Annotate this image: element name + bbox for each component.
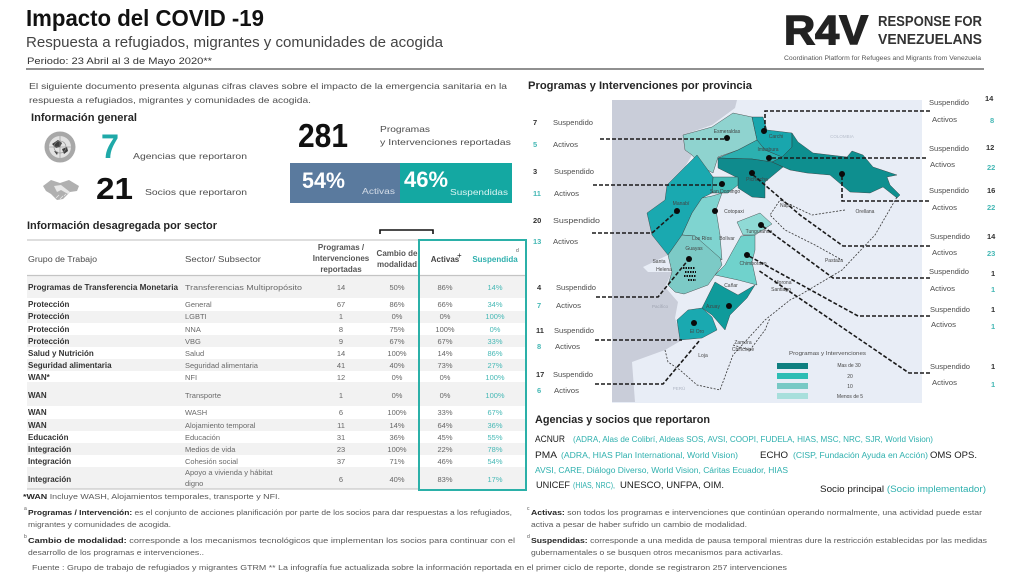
metric: 281 programas: Programas: [380, 124, 430, 134]
table rows: Seguridad alimentaria: [185, 361, 259, 370]
partner list: OMS OPS.: [930, 450, 977, 460]
table rows: 41: [337, 361, 345, 370]
logo: R4V Response for Venezuelans: Coordination Platform for Refugees and Migrants from Venezuela: [784, 55, 981, 62]
province: El Oro: [677, 308, 717, 340]
intro text: respuesta a refugiados, migrantes y comunidades de acogida.: [29, 95, 311, 105]
header: title block: Respuesta a refugiados, migrantes y comunidades de acogida: [26, 35, 444, 51]
legend: programas e intervenciones: 10: [847, 384, 853, 390]
table rows: 34%: [487, 300, 503, 309]
province figures: left: Suspendido: [553, 370, 593, 379]
province labels: Guayas: [685, 246, 703, 252]
table rows: WASH: [185, 408, 207, 417]
province: Tungurahua / Cotopaxi: [737, 213, 772, 235]
province figures: left: Suspendido: [553, 216, 600, 225]
table rows: 36%: [389, 433, 405, 442]
partner list: (HIAS, NRC),: [573, 481, 615, 490]
province labels: Zamora: [734, 340, 752, 346]
heading: programas por provincia: Programas y Intervenciones por provincia: [528, 80, 753, 92]
footnotes: left: desarrollo de los programas e intervenciones..: [28, 548, 204, 557]
table rows: Salud: [185, 349, 204, 358]
province figures: right: Suspendido: [929, 144, 969, 153]
province labels: Pacífico: [652, 304, 668, 309]
table rows: Protección: [28, 312, 69, 321]
table header: +: [457, 251, 462, 260]
panel: agencias y socios: [535, 414, 986, 494]
table rows: 86%: [487, 349, 503, 358]
footnotes: left: a: [24, 506, 27, 512]
table rows: WAN: [28, 421, 47, 430]
table header: Programas /: [318, 243, 365, 252]
table rows: Transferencias Multipropósito: [185, 283, 302, 292]
province labels: Carchi: [769, 134, 783, 140]
province figures: right: Suspendido: [929, 186, 969, 195]
metric: 21 socios: 21: [96, 171, 133, 206]
table rows: 12: [337, 373, 345, 382]
metric: 21 socios: Socios que reportaron: [145, 187, 247, 197]
province figures: right: 16: [987, 186, 995, 195]
table rows: 50%: [389, 283, 405, 292]
partner list: UNICEF: [536, 480, 571, 490]
province: Chimborazo: [715, 235, 757, 285]
province figures: right: [929, 94, 996, 389]
footnotes: right: Suspendidas: corresponde a una medida de pausa temporal mientras dure la restricción establecidas por las medidas: [531, 536, 987, 545]
stacked bar: activas vs suspendidas: [290, 163, 512, 203]
province figures: left: Activos: [553, 237, 578, 246]
metric: 281 programas: 281: [298, 117, 348, 154]
province figures: right: Suspendido: [930, 232, 970, 241]
table rows: 55%: [487, 433, 503, 442]
table rows: 31: [337, 433, 345, 442]
province figures: left: 17: [536, 370, 544, 379]
table rows: 1: [339, 391, 343, 400]
province figures: left: 11: [533, 189, 541, 198]
table rows: 100%: [387, 349, 407, 358]
table rows: 33%: [487, 337, 503, 346]
footnotes: right: activa a pesar de haber sufrido un cambio de modalidad.: [531, 520, 747, 529]
legend: socio principal: Socio principal (Socio implementador): [820, 484, 986, 494]
province figures: right: Suspendido: [930, 305, 970, 314]
table rows: 14%: [487, 283, 503, 292]
table rows: Cohesión social: [185, 457, 238, 466]
province figures: right: Activos: [932, 203, 957, 212]
province labels: Napo: [780, 203, 792, 209]
stacked bar: activas vs suspendidas: 54%: [302, 168, 345, 193]
province figures: right: Activos: [932, 378, 957, 387]
table rows: 22%: [437, 445, 453, 454]
province: Pichincha: [718, 158, 783, 198]
province figures: left: 4: [537, 283, 542, 292]
province labels: Santiago: [771, 287, 791, 293]
province labels: Loja: [698, 353, 708, 359]
province: Carchi: [752, 117, 792, 157]
table rows: Transporte: [185, 391, 221, 400]
legend: programas e intervenciones: Mas de 30: [837, 363, 861, 369]
partner list: ACNUR: [535, 434, 565, 444]
province labels: Morona: [775, 280, 792, 286]
table rows: 33%: [437, 408, 453, 417]
table rows: Seguridad alimentaria: [28, 361, 112, 370]
province labels: [652, 129, 875, 391]
leader lines: [592, 111, 930, 384]
table rows: 14%: [389, 421, 405, 430]
icon: United Nations emblem: [44, 132, 76, 162]
table rows: 11: [337, 421, 345, 430]
province: Los Ríos: [682, 193, 722, 260]
heading: información general: Información general: [31, 112, 137, 124]
province figures: right: 14: [985, 94, 994, 103]
province figures: left: Activos: [554, 189, 579, 198]
table rows: 78%: [487, 445, 503, 454]
table rows: [28, 283, 505, 488]
table rows: 37: [337, 457, 345, 466]
table rows: Salud y Nutrición: [28, 349, 94, 358]
footnotes: left: migrantes y comunidades de acogida.: [28, 520, 171, 529]
province figures: right: 22: [987, 203, 995, 212]
province figures: right: Activos: [930, 160, 955, 169]
table rows: 14: [337, 283, 345, 292]
table rows: Educación: [185, 433, 220, 442]
province figures: right: Activos: [931, 320, 956, 329]
table rows: 0%: [440, 373, 451, 382]
province figures: right: 14: [987, 232, 996, 241]
source line: Fuente : Grupo de trabajo de refugiados y migrantes GTRM ** La infografía fue actualizada sobre la información reportada en el primer ciclo de reporte, donde se registraron 257 intervenciones: [32, 563, 787, 572]
province figures: left: 3: [533, 167, 537, 176]
table rows: Integración: [28, 475, 71, 484]
table rows: 36%: [487, 421, 503, 430]
table rows: 100%: [485, 312, 505, 321]
table rows: 100%: [485, 373, 505, 382]
table rows: 86%: [389, 300, 405, 309]
province: Manabí: [647, 155, 713, 255]
intro text: El siguiente documento presenta algunas cifras claves sobre el impacto de la emergencia sanitaria en la: [29, 81, 507, 91]
footnotes: left: [23, 492, 515, 557]
table rows: Apoyo a vivienda y hábitat: [185, 468, 273, 477]
province labels: Helena: [656, 267, 672, 273]
ocean: [612, 100, 737, 402]
logo: R4V Response for Venezuelans: [784, 7, 982, 62]
province: Imbabura: [718, 140, 782, 162]
table rows: LGBTI: [185, 312, 207, 321]
table rows: NNA: [185, 325, 201, 334]
metric: 281 programas: [298, 117, 511, 154]
table rows: Educación: [28, 433, 69, 442]
province figures: right: Suspendido: [929, 98, 969, 107]
province figures: left: Activos: [554, 386, 579, 395]
legend: programas e intervenciones: [777, 351, 866, 400]
table rows: 67%: [437, 337, 453, 346]
legend: programas e intervenciones: Programas y Intervenciones: [789, 351, 866, 357]
province labels: Pastaza: [825, 258, 843, 264]
table rows: 0%: [440, 312, 451, 321]
table header: Intervenciones: [313, 254, 370, 263]
province figures: left: 11: [536, 326, 544, 335]
province boundaries: Loja, Zamora, Morona, Pastaza, Orellana: [665, 197, 897, 390]
table rows: Protección: [28, 337, 69, 346]
table rows: 45%: [437, 433, 453, 442]
table rows: 67%: [487, 408, 503, 417]
partner list: [535, 434, 977, 490]
province figures: right: 1: [991, 322, 995, 331]
partner list: AVSI, CARE, Diálogo Diverso, World Vision, Cáritas Ecuador, HIAS: [535, 466, 788, 475]
footnotes: left: b: [24, 534, 27, 540]
metric: 7 agencias: Agencias que reportaron: [133, 151, 247, 161]
province figures: left: 7: [537, 301, 541, 310]
table rows: 6: [339, 408, 343, 417]
province figures: right: 1: [991, 362, 995, 371]
table rows: 14%: [437, 349, 453, 358]
table rows: Integración: [28, 445, 71, 454]
province: Santo Domingo: [712, 177, 738, 193]
metric: 7 agencias: 7: [101, 128, 119, 166]
table rows: digno: [185, 479, 203, 488]
metric: 281 programas: y Intervenciones reportadas: [380, 137, 511, 147]
table header: Suspendida: [472, 255, 518, 264]
table rows: Medios de vida: [185, 445, 236, 454]
table: sectores: [27, 230, 526, 490]
partner list: ECHO: [760, 450, 788, 460]
panel: información general: [31, 112, 512, 206]
table rows: WAN: [28, 408, 47, 417]
province figures: right: 8: [990, 116, 994, 125]
partner list: (ADRA, HIAS Plan International, World Vision): [561, 451, 738, 460]
province labels: Los Ríos: [692, 236, 712, 242]
table rows: 14: [337, 349, 345, 358]
partner list: (CISP, Fundación Ayuda en Acción): [793, 451, 928, 460]
province figures: right: 1: [991, 285, 995, 294]
table header: Cambio de: [377, 249, 418, 258]
province figures: right: Suspendido: [930, 362, 970, 371]
table header: Activas: [431, 255, 460, 264]
icon: handshake: [43, 180, 79, 200]
province: Esmeraldas: [683, 113, 757, 173]
table rows: 40%: [389, 475, 405, 484]
logo: R4V Response for Venezuelans: VENEZUELANS: [878, 32, 982, 48]
province dots: [674, 128, 845, 326]
footnotes: right: d: [527, 534, 530, 540]
heading: información desagregada por sector: Información desagregada por sector: [27, 220, 218, 232]
table rows: 23: [337, 445, 345, 454]
footnotes: right: c: [527, 506, 530, 512]
province figures: right: 22: [987, 163, 995, 172]
province figures: right: Activos: [930, 284, 955, 293]
table rows: NFI: [185, 373, 197, 382]
table rows: WAN: [28, 391, 47, 400]
city speckle: Guayaquil: [683, 268, 696, 280]
province figures: right: 1: [991, 269, 995, 278]
legend: programas e intervenciones: Menos de 5: [837, 394, 863, 400]
partner list: (ADRA, Alas de Colibrí, Aldeas SOS, AVSI, COOPI, FUDELA, HIAS, MSC, NRC, SJR, World Vision): [573, 435, 933, 444]
metric: 21 socios: [96, 171, 247, 206]
province figures: right: Activos: [932, 115, 957, 124]
province figures: right: 23: [987, 249, 995, 258]
table rows: 64%: [437, 421, 453, 430]
map: provinces of Ecuador: [592, 100, 930, 403]
table rows: Integración: [28, 457, 71, 466]
province labels: Chinchipe: [732, 347, 754, 353]
footnotes: right: Activas: son todos los programas e intervenciones que continúan operando normalmente, una actividad puede estar: [531, 508, 983, 517]
table rows: 86%: [437, 283, 453, 292]
table rows: 100%: [387, 408, 407, 417]
province labels: COLOMBIA: [830, 134, 854, 139]
table rows: 75%: [389, 325, 405, 334]
table rows: 9: [339, 337, 343, 346]
legend: programas e intervenciones: 20: [847, 374, 853, 380]
table rows: 54%: [487, 457, 503, 466]
table rows: General: [185, 300, 212, 309]
table rows: 0%: [392, 391, 403, 400]
province figures: left: Activos: [553, 140, 578, 149]
province figures: right: 1: [991, 380, 995, 389]
stacked bar: activas vs suspendidas: Activas: [362, 187, 395, 196]
table rows: 67: [337, 300, 345, 309]
province labels: PERÚ: [673, 385, 685, 391]
table rows: Programas de Transferencia Monetaria: [28, 283, 179, 292]
table header: [28, 243, 519, 274]
table header: reportadas: [320, 265, 362, 274]
province labels: Orellana: [856, 209, 875, 215]
table header: modalidad: [377, 260, 417, 269]
intro text: [29, 81, 507, 105]
province labels: Pichincha: [746, 177, 768, 183]
province labels: Imbabura: [757, 147, 779, 153]
bracket: [380, 230, 433, 234]
table rows: 67%: [389, 337, 405, 346]
partner list: PMA: [535, 450, 557, 460]
province figures: left: Activos: [556, 301, 581, 310]
province: Sucumbíos: [772, 133, 900, 198]
province labels: Esmeraldas: [714, 129, 741, 135]
table rows: 8: [339, 325, 343, 334]
province figures: left: 13: [533, 237, 541, 246]
table rows: Protección: [28, 300, 69, 309]
province labels: Cañar: [724, 283, 738, 289]
table header: Sector/ Subsector: [185, 255, 261, 264]
province figures: right: Activos: [932, 248, 957, 257]
footnotes: right: gubernamentales o se busquen otros mecanismos para activarlas.: [531, 548, 783, 557]
table rows: 66%: [437, 300, 453, 309]
header: title block: Periodo: 23 Abril al 3 de Mayo 2020**: [27, 56, 213, 66]
table rows: 83%: [437, 475, 453, 484]
table rows: WAN*: [28, 373, 51, 382]
province labels: El Oro: [690, 329, 704, 335]
table rows: Protección: [28, 325, 69, 334]
province: Azuay: [702, 282, 755, 330]
province figures: right: Suspendido: [929, 267, 969, 276]
table rows: Alojamiento temporal: [185, 421, 256, 430]
province labels: Azuay: [706, 304, 720, 310]
table header: Grupo de Trabajo: [28, 255, 98, 264]
province labels: Bolívar: [719, 236, 735, 242]
table rows: 100%: [435, 325, 455, 334]
logo: R4V Response for Venezuelans: RESPONSE FOR: [878, 14, 982, 30]
table rows: 40%: [389, 361, 405, 370]
partner list: UNESCO, UNFPA, OIM.: [620, 480, 724, 490]
table rows: 17%: [487, 475, 503, 484]
table rows: 0%: [392, 312, 403, 321]
stacked bar: activas vs suspendidas: 46%: [404, 167, 448, 192]
province figures: left: Suspendido: [556, 283, 596, 292]
table rows: 73%: [437, 361, 453, 370]
province labels: San Domingo: [710, 189, 740, 195]
province figures: left: Suspendido: [554, 326, 594, 335]
province figures: left: 6: [537, 386, 541, 395]
metric: 7 agencias: [101, 128, 247, 166]
footnotes: left: *WAN Incluye WASH, Alojamientos temporales, transporte y NFI.: [23, 492, 280, 501]
table rows: 71%: [389, 457, 405, 466]
heading: agencias y socios: Agencias y socios que reportaron: [535, 414, 710, 426]
table rows: 46%: [437, 457, 453, 466]
table rows: VBG: [185, 337, 201, 346]
table rows: 0%: [440, 391, 451, 400]
highlight box: activas y suspendidas: [419, 240, 526, 490]
footnotes: right: [527, 506, 987, 557]
province figures: right: 12: [986, 143, 994, 152]
province figures: left: 5: [533, 140, 537, 149]
province labels: Manabí: [673, 201, 690, 207]
table rows: 1: [339, 312, 343, 321]
province figures: left: 8: [537, 342, 541, 351]
province: Guayas: [668, 235, 722, 294]
logo: R4V Response for Venezuelans: R4V: [784, 7, 869, 53]
table header: d: [516, 248, 519, 254]
footnotes: left: Programas / Intervención: es el conjunto de acciones planificación por parte de los socios para dar respuestas a los refugiados,: [28, 508, 512, 517]
table rows: 0%: [392, 373, 403, 382]
province figures: right: 1: [991, 305, 995, 314]
province figures: left: Suspendido: [553, 118, 593, 127]
table rows: 27%: [487, 361, 503, 370]
province labels: Cotopaxi: [724, 209, 744, 215]
province figures: left: [533, 118, 600, 395]
stacked bar: activas vs suspendidas: Suspendidas: [450, 188, 508, 197]
province labels: Tungurahua: [746, 229, 773, 235]
province figures: left: 20: [533, 216, 541, 225]
province labels: Santa: [652, 259, 666, 265]
table rows: 0%: [490, 325, 501, 334]
table rows: 6: [339, 475, 343, 484]
province figures: left: Suspendido: [554, 167, 594, 176]
province figures: left: Activos: [555, 342, 580, 351]
header: title block: Impacto del COVID -19: [26, 5, 264, 31]
province labels: Chimborazo: [740, 261, 767, 267]
header: title block: [26, 5, 444, 66]
table rows: 100%: [485, 391, 505, 400]
footnotes: left: Cambio de modalidad: corresponde a los mecanismos tecnológicos que implementan los socios para continuar con el: [28, 536, 515, 545]
province figures: left: 7: [533, 118, 537, 127]
table rows: 100%: [387, 445, 407, 454]
